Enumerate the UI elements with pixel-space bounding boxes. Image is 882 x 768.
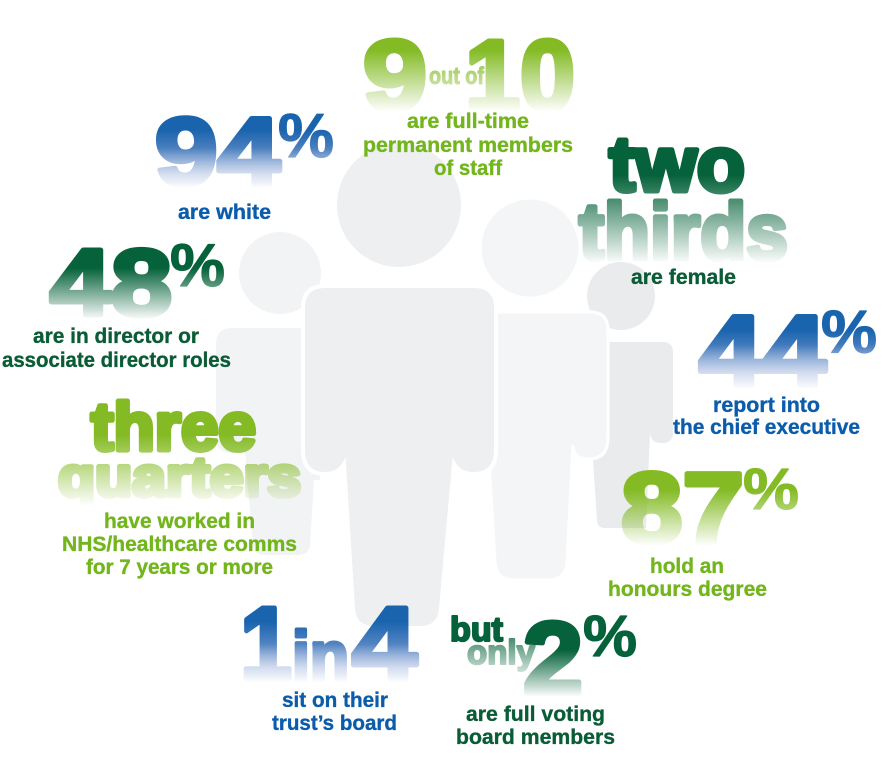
people silhouettes: [216, 143, 673, 628]
stat: two thirds: [578, 138, 788, 284]
caption: chief executive: [673, 393, 860, 439]
big words: two thirds: two: [609, 120, 745, 208]
caption: female: are female: [631, 265, 736, 289]
caption: voting members: are full voting: [466, 702, 605, 726]
caption: NHS experience: have worked in: [104, 509, 255, 533]
big number: 94%: [156, 113, 333, 186]
stat: 1 in 4: [244, 606, 420, 730]
big number: 1 in 4: 1: [240, 586, 292, 702]
big number: 94%: %: [278, 102, 334, 171]
big number: 48%: [48, 243, 224, 318]
figure: centre person: [303, 143, 496, 628]
stat: 48%: [2, 243, 230, 368]
big number: 94%: 94: [155, 98, 280, 206]
big number: but only 2%: [451, 614, 636, 696]
caption: full-time: of staff: [434, 156, 503, 180]
caption: NHS experience: for 7 years or more: [86, 555, 273, 579]
big number: 9 out of 10: [364, 38, 574, 110]
stat: 87%: [609, 468, 798, 601]
caption: full-time: are full-time: [407, 109, 529, 133]
caption: full-time: permanent members: [363, 133, 573, 157]
figure: right person: [480, 200, 608, 580]
big number: 48%: %: [170, 232, 225, 299]
caption: full-time: [363, 109, 573, 180]
big number: 44%: 44: [699, 296, 826, 408]
caption: NHS experience: NHS/healthcare comms: [62, 532, 297, 556]
figure: far right person: [587, 262, 673, 528]
stat: 9 out of 10: [364, 38, 574, 176]
figure: left person: [216, 232, 321, 555]
caption: director roles: associate director roles: [2, 348, 231, 372]
caption: chief executive: the chief executive: [673, 415, 860, 439]
big words: three quarters: quarters: [58, 445, 301, 508]
caption: honours degree: honours degree: [608, 577, 767, 601]
stat: 94%: [156, 113, 333, 220]
stat: three quarters: [58, 389, 301, 579]
caption: director roles: [2, 324, 231, 372]
caption: honours degree: hold an: [650, 554, 724, 578]
stat: 44%: [673, 310, 876, 434]
big number: 44%: [698, 310, 876, 386]
big number: 1 in 4: in: [292, 617, 349, 695]
big words: three quarters: [58, 398, 302, 504]
big number: 48%: 48: [50, 230, 172, 336]
caption: director roles: are in director or: [33, 324, 200, 348]
big number: but only 2%: only: [467, 634, 535, 672]
caption: NHS experience: [62, 509, 297, 579]
caption: trust board: sit on their: [282, 688, 389, 712]
big number: 1 in 4: 4: [352, 586, 417, 702]
caption: trust board: trust’s board: [272, 711, 397, 735]
big words: three quarters: three: [91, 389, 256, 465]
big number: but only 2%: 2: [523, 602, 583, 716]
stat: but only 2%: [451, 614, 636, 744]
big number: 44%: %: [821, 298, 877, 366]
big number: 87%: %: [743, 457, 799, 522]
big words: two thirds: [578, 138, 788, 261]
big number: but only 2%: but: [450, 611, 503, 649]
caption: voting members: [456, 702, 615, 749]
big number: 87%: 87: [621, 452, 744, 564]
big number: but only 2%: %: [583, 604, 637, 669]
big number: 9 out of 10: 9: [363, 20, 427, 132]
big number: 1 in 4: [244, 606, 420, 680]
caption: trust board: [272, 688, 397, 735]
big number: 9 out of 10: out of: [429, 63, 485, 90]
big words: two thirds: thirds: [579, 187, 788, 276]
big number: 9 out of 10: 10: [465, 20, 575, 132]
caption: honours degree: [608, 554, 767, 601]
caption: white: are white: [178, 200, 271, 224]
caption: chief executive: report into: [713, 393, 820, 417]
big number: 87%: [622, 468, 798, 544]
caption: voting members: board members: [456, 725, 615, 749]
